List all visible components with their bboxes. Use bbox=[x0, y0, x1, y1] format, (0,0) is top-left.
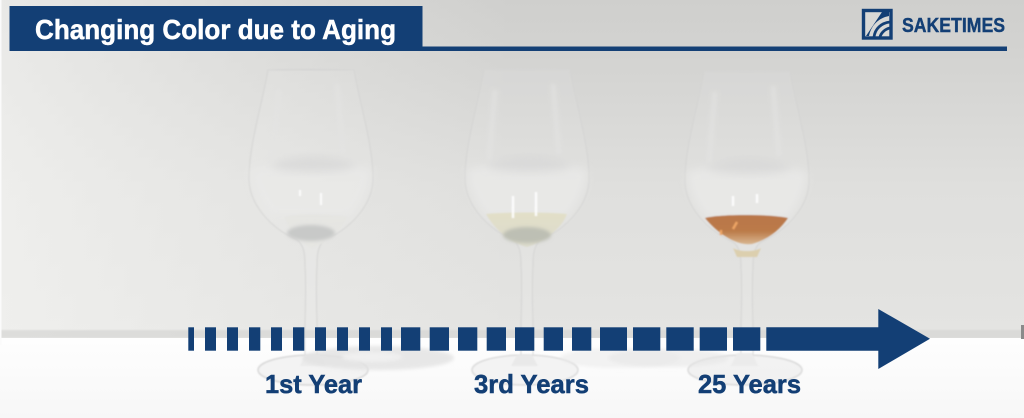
label: 25 Years: 25 Years bbox=[698, 369, 801, 399]
SAKETIMES logo bbox=[864, 10, 1005, 38]
label: 3rd Years: 3rd Years bbox=[474, 369, 589, 399]
logo icon bbox=[864, 10, 891, 38]
glass: 25 years, amber liquid bbox=[608, 71, 809, 385]
header rule bbox=[422, 46, 1007, 51]
title banner bbox=[10, 6, 422, 51]
glass: 1st year, clear liquid bbox=[249, 69, 454, 385]
glass: 3rd year, pale yellow liquid bbox=[465, 69, 680, 385]
timeline arrow, dashed to solid bbox=[188, 309, 930, 369]
title text: Changing Color due to Aging bbox=[35, 14, 396, 45]
label: 1st Year: 1st Year bbox=[265, 369, 362, 399]
logo wordmark: SAKETIMES bbox=[902, 15, 1005, 37]
